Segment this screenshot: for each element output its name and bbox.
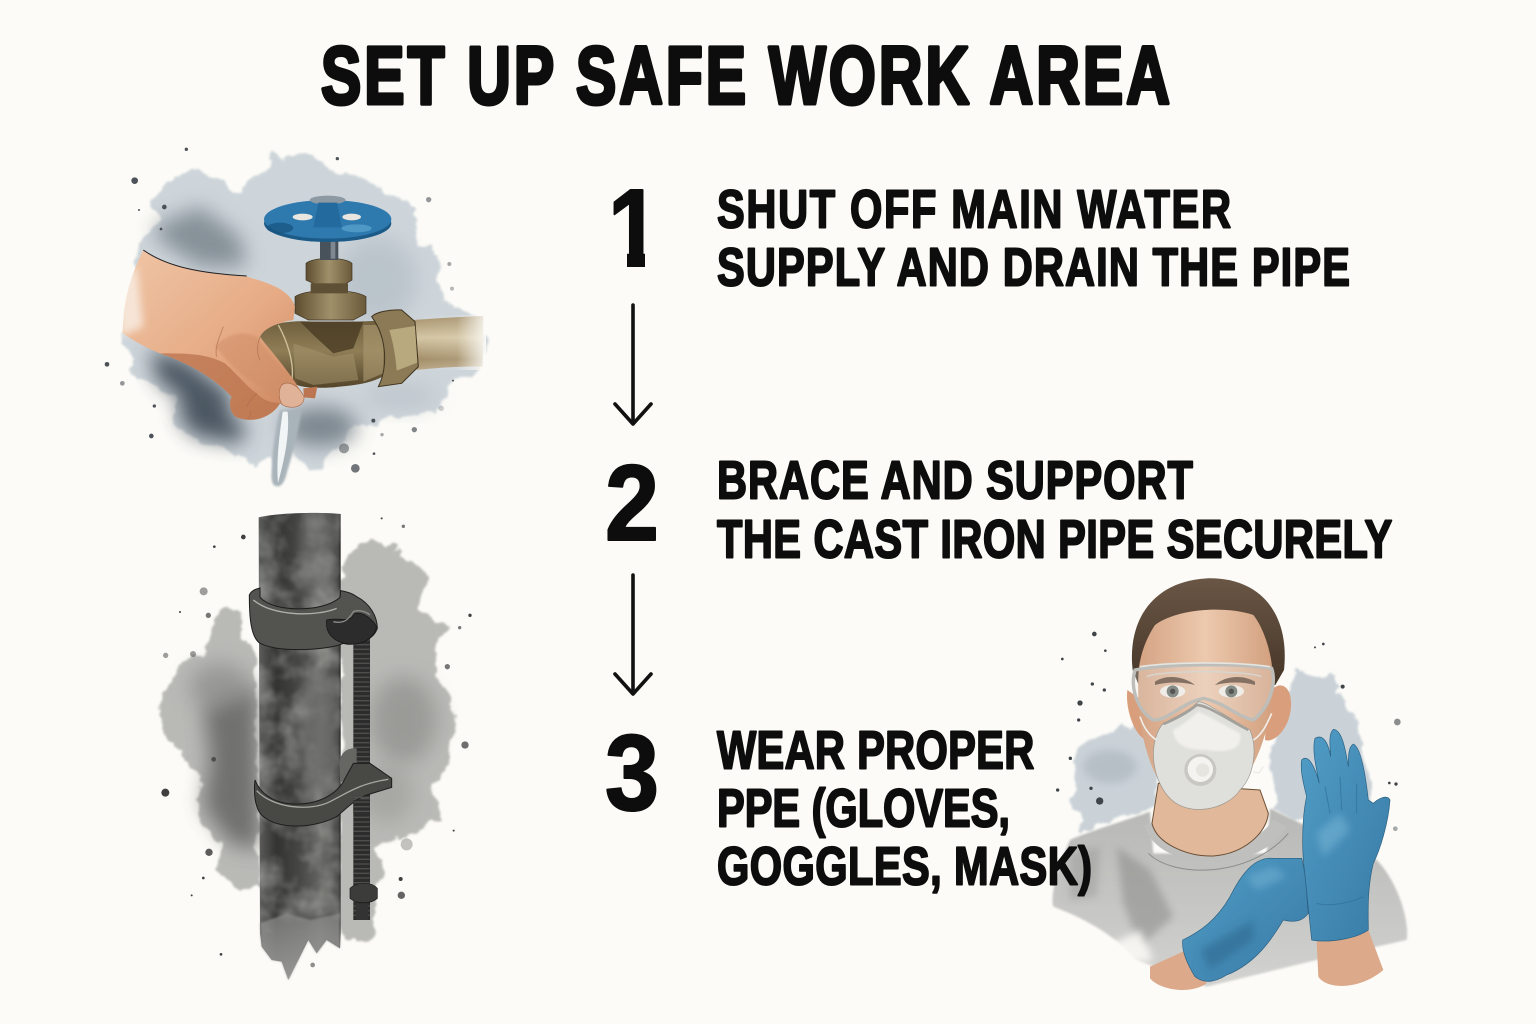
safety goggles [1133, 663, 1273, 720]
face [1138, 610, 1273, 799]
upper pipe clamp [249, 588, 377, 650]
water stream [272, 409, 302, 486]
step 3 text [717, 720, 1092, 897]
step 2 text: THE CAST IRON PIPE SECURELY [717, 509, 1392, 570]
title: SET UP SAFE WORK AREA [321, 31, 1170, 122]
hand gripping valve [117, 250, 317, 420]
bonnet nut and stem [295, 239, 366, 320]
step 1 text [717, 179, 1350, 298]
pipe shaft [259, 513, 341, 980]
illustration: worker wearing goggles, respirator and gloves [1052, 578, 1407, 990]
ears [1127, 685, 1291, 741]
lower pipe clamp [254, 748, 392, 826]
brass supply pipe [413, 315, 486, 370]
paint speckles [1056, 632, 1401, 831]
step 1 text: SUPPLY AND DRAIN THE PIPE [717, 237, 1350, 298]
hex union nut [372, 310, 418, 387]
blue valve handwheel [264, 196, 391, 242]
step 3 number: 3 [605, 712, 659, 833]
step 2 text: BRACE AND SUPPORT [717, 450, 1193, 511]
step 2 text [717, 450, 1392, 570]
t-shirt [1052, 808, 1407, 987]
arrow: step 1 to step 2 [615, 305, 651, 424]
threaded rod [350, 630, 377, 920]
watercolor splash behind worker [1073, 670, 1373, 833]
paint speckles [105, 148, 454, 473]
step 3 text: PPE (GLOVES, [717, 778, 1010, 839]
illustration: cast iron pipe with riser clamp [160, 513, 472, 980]
paint speckles [161, 517, 472, 967]
watercolor splash behind pipe [160, 537, 453, 940]
step 2 number: 2 [605, 442, 659, 563]
step 1 number: 1 [608, 167, 660, 290]
raised blue gloved hand [1301, 729, 1390, 941]
hair [1132, 578, 1285, 685]
blue gloved hand pulling cuff [1183, 858, 1308, 981]
step 3 text: GOGGLES, MASK) [717, 836, 1092, 897]
watercolor splash behind valve [123, 153, 483, 483]
valve body [260, 321, 389, 388]
arrow: step 2 to step 3 [615, 575, 651, 694]
lower arms [1150, 930, 1383, 990]
eyes and eyebrows [1155, 677, 1255, 698]
neck [1152, 783, 1268, 856]
illustration: hand turning water shutoff valve [105, 148, 486, 486]
step 3 text: WEAR PROPER [717, 720, 1034, 781]
step 1 text: SHUT OFF MAIN WATER [717, 179, 1231, 240]
N95 respirator mask [1140, 702, 1272, 809]
